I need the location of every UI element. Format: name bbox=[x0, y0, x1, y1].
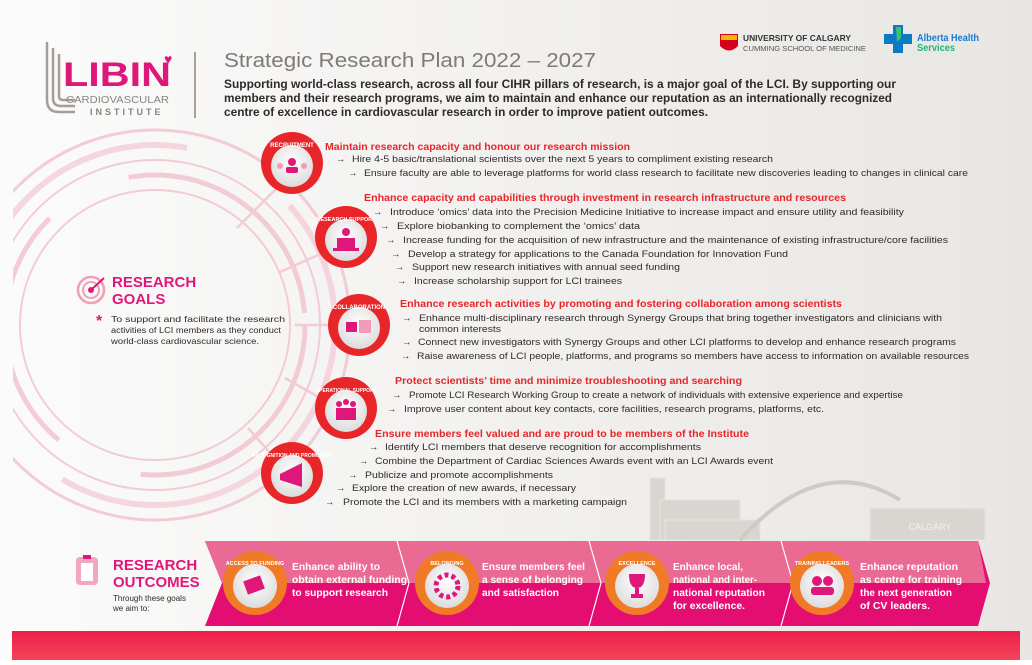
icon: target bbox=[78, 277, 104, 303]
logo: University of Calgary: CUMMING SCHOOL OF MEDICINE bbox=[743, 44, 866, 53]
goal 5: recognition: Promote the LCI and its members with a marketing campaign bbox=[343, 497, 627, 507]
goal 5: recognition: → bbox=[336, 483, 345, 493]
goal 1: recruitment bbox=[325, 141, 968, 178]
research goals description: world-class cardiovascular science. bbox=[110, 337, 259, 346]
goal 5: recognition: Publicize and promote accomplishments bbox=[365, 470, 553, 480]
building illustration bbox=[650, 478, 985, 540]
goal 4: operational support bbox=[387, 375, 903, 414]
goal 2: research support: → bbox=[397, 276, 406, 286]
icon: research support: RESEARCH SUPPORT bbox=[317, 217, 376, 223]
goal 4: operational support: Protect scientists’ time and minimize troubleshooting and searching bbox=[395, 375, 742, 387]
outcome 1: access to funding: obtain external funding bbox=[292, 575, 407, 586]
goal 4: operational support: Promote LCI Research Working Group to create a network of individuals with extensive experience and expertise bbox=[409, 390, 903, 400]
intro paragraph: Supporting world-class research, across all four CIHR pillars of research, is a major goal of the LCI. By supporting our bbox=[224, 79, 897, 91]
goal 3: collaboration: Enhance research activities by promoting and fostering collaboration among scientists bbox=[400, 298, 842, 310]
goal 5: recognition: Combine the Department of Cardiac Sciences Awards event with an LCI Awards event bbox=[375, 456, 773, 466]
logo: Libin Cardiovascular Institute: ♥ bbox=[164, 51, 172, 67]
outcome 1: access to funding bbox=[223, 551, 407, 615]
goal 3: collaboration: → bbox=[401, 351, 410, 361]
goal 3: collaboration: Enhance multi-disciplinary research through Synergy Groups that bring together investigators and clinicians with bbox=[419, 313, 942, 323]
goal 5: recognition: → bbox=[325, 497, 334, 507]
goal 3: collaboration: Raise awareness of LCI people, platforms, and programs so members have access to information on available resources bbox=[417, 351, 969, 361]
outcome 3: excellence: EXCELLENCE bbox=[619, 561, 656, 567]
goal 2: research support: → bbox=[380, 221, 389, 231]
research goals heading bbox=[78, 274, 196, 308]
goal 3: collaboration: → bbox=[402, 313, 411, 323]
goal 3: collaboration: → bbox=[402, 337, 411, 347]
outcome 2: belonging: Ensure members feel bbox=[482, 562, 585, 573]
outcome 4: training leaders: Enhance reputation bbox=[860, 562, 958, 573]
goal 2: research support: Enhance capacity and capabilities through investment in research infrastructure and resources bbox=[364, 192, 846, 204]
icon: operational support bbox=[315, 377, 377, 439]
outcome 3: excellence: Enhance local, bbox=[673, 562, 743, 573]
icon: collaboration: COLLABORATION bbox=[333, 305, 385, 311]
background concentric circles bbox=[0, 130, 350, 520]
research goals description: * bbox=[96, 313, 103, 330]
outcome 2: belonging bbox=[415, 551, 585, 615]
research outcomes heading: Through these goals bbox=[113, 594, 186, 603]
goal 5: recognition: Explore the creation of new awards, if necessary bbox=[352, 483, 576, 493]
research goals description: activities of LCI members as they conduct bbox=[111, 326, 282, 335]
goal 2: research support: → bbox=[395, 262, 404, 272]
outcome 3: excellence: for excellence. bbox=[673, 601, 745, 612]
intro paragraph bbox=[224, 79, 897, 119]
goal 2: research support bbox=[364, 192, 948, 286]
goal 1: recruitment: Ensure faculty are able to leverage platforms for world class research to facilitate new discoveries leading to changes in clinical care bbox=[364, 168, 968, 178]
intro paragraph: centre of excellence in cardiovascular research in order to improve patient outcomes. bbox=[224, 107, 708, 119]
title: Strategic Research Plan 2022 – 2027 bbox=[224, 50, 596, 72]
outcome 2: belonging: and satisfaction bbox=[482, 588, 559, 599]
goal 5: recognition: Identify LCI members that deserve recognition for accomplishments bbox=[385, 442, 701, 452]
goal 4: operational support: → bbox=[392, 390, 401, 400]
outcome 1: access to funding: Enhance ability to bbox=[292, 562, 380, 573]
goal 1: recruitment: Hire 4-5 basic/translational scientists over the next 5 years to compliment existing research bbox=[352, 154, 773, 164]
goal 5: recognition: Ensure members feel valued and are proud to be members of the Institute bbox=[375, 428, 749, 440]
goal 3: collaboration: common interests bbox=[419, 324, 501, 334]
goal 2: research support: Explore biobanking to complement the ‘omics’ data bbox=[397, 221, 641, 231]
goal 5: recognition: → bbox=[369, 442, 378, 452]
building illustration: CALGARY bbox=[909, 522, 951, 532]
research goals heading: GOALS bbox=[112, 291, 165, 308]
goal 3: collaboration bbox=[400, 298, 969, 361]
goal 2: research support: Increase funding for the acquisition of new infrastructure and the maintenance of existing infrastructure/core facilities bbox=[403, 235, 948, 245]
logo: University of Calgary bbox=[720, 33, 866, 53]
outcome 3: excellence bbox=[605, 551, 765, 615]
goal 1: recruitment: Maintain research capacity and honour our research mission bbox=[325, 141, 630, 153]
goal 4: operational support: Improve user content about key contacts, core facilities, research programs, platforms, etc. bbox=[404, 404, 824, 414]
goal 5: recognition: → bbox=[348, 470, 357, 480]
goal 1: recruitment: → bbox=[336, 154, 345, 164]
icon: recruitment: RECRUITMENT bbox=[270, 143, 314, 149]
research outcomes heading bbox=[76, 555, 200, 613]
research goals description bbox=[96, 313, 286, 346]
research goals description: To support and facilitate the research bbox=[111, 315, 286, 324]
research outcomes heading: OUTCOMES bbox=[113, 574, 200, 591]
research outcomes heading: we aim to: bbox=[112, 604, 149, 613]
logo: Alberta Health Services bbox=[884, 25, 979, 54]
logo: Libin Cardiovascular Institute: CARDIOVASCULAR bbox=[66, 95, 169, 106]
goal 3: collaboration: Connect new investigators with Synergy Groups and other LCI platforms to develop and enhance research programs bbox=[418, 337, 956, 347]
outcome 4: training leaders: of CV leaders. bbox=[860, 601, 930, 612]
logo: Libin Cardiovascular Institute bbox=[47, 42, 172, 117]
icon: operational support: OPERATIONAL SUPPORT bbox=[315, 388, 377, 394]
goal 2: research support: → bbox=[373, 207, 382, 217]
logo: Libin Cardiovascular Institute: LIBIN bbox=[63, 56, 171, 94]
outcomes band bbox=[205, 541, 990, 626]
intro paragraph: members and their research programs, we aim to maintain and enhance our reputation as an internationally recognized bbox=[224, 93, 892, 105]
logo: University of Calgary: UNIVERSITY OF CALGARY bbox=[743, 33, 851, 43]
research outcomes heading: RESEARCH bbox=[113, 557, 197, 574]
research goals heading: RESEARCH bbox=[112, 274, 196, 291]
goal 2: research support: Introduce ‘omics’ data into the Precision Medicine Initiative to increase impact and ensure utility and feasibility bbox=[390, 207, 904, 217]
outcome 4: training leaders bbox=[790, 551, 962, 615]
goal 2: research support: → bbox=[386, 235, 395, 245]
icon: recognition and promotion: RECOGNITION AND PROMOTION bbox=[252, 453, 332, 459]
icon: clipboard bbox=[76, 555, 98, 585]
goal 1: recruitment: → bbox=[348, 168, 357, 178]
goal 5: recognition: → bbox=[359, 456, 368, 466]
goal icons bbox=[252, 132, 390, 504]
goal 2: research support: Support new research initiatives with annual seed funding bbox=[412, 262, 680, 272]
logo: Alberta Health Services: Alberta Health bbox=[917, 33, 979, 44]
outcome 4: training leaders: as centre for training bbox=[860, 575, 962, 586]
icon: research support bbox=[315, 206, 377, 268]
outcome 4: training leaders: TRAINING LEADERS bbox=[795, 561, 850, 567]
icon: recruitment bbox=[261, 132, 323, 194]
goal 2: research support: Develop a strategy for applications to the Canada Foundation for Innovation Fund bbox=[408, 249, 788, 259]
outcome 3: excellence: national reputation bbox=[673, 588, 765, 599]
outcome 4: training leaders: the next generation bbox=[860, 588, 952, 599]
outcome 3: excellence: national and inter- bbox=[673, 575, 757, 586]
logo: Alberta Health Services: Services bbox=[917, 43, 955, 54]
outcome 1: access to funding: ACCESS TO FUNDING bbox=[226, 561, 284, 567]
goal 4: operational support: → bbox=[387, 404, 396, 414]
goal 2: research support: Increase scholarship support for LCI trainees bbox=[414, 276, 622, 286]
outcome 2: belonging: a sense of belonging bbox=[482, 575, 583, 586]
outcome 2: belonging: BELONGING bbox=[430, 561, 464, 567]
bottom red bar bbox=[12, 631, 1020, 660]
icon: recognition and promotion bbox=[252, 442, 332, 504]
goal 5: recognition bbox=[325, 428, 773, 507]
logo: Libin Cardiovascular Institute: INSTITUTE bbox=[90, 107, 164, 117]
goal 2: research support: → bbox=[391, 249, 400, 259]
outcome 1: access to funding: to support research bbox=[292, 588, 388, 599]
icon: collaboration bbox=[328, 294, 390, 356]
